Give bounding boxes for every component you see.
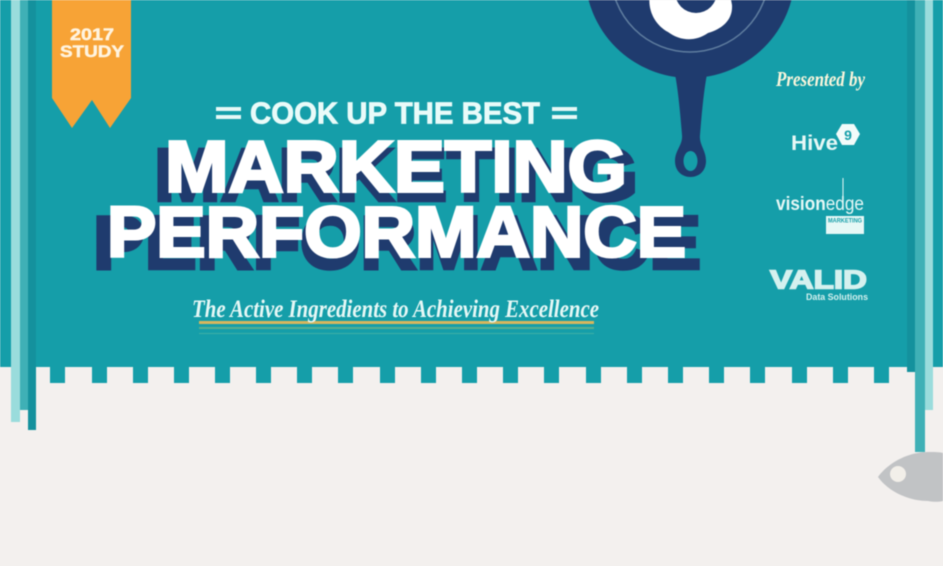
right hanging ribbon strips [907,0,933,452]
teal banner with notched edge [0,0,943,383]
subtitle with underline [192,296,599,334]
left hanging ribbon strips [11,0,36,430]
icon: frying pan with egg [585,0,795,177]
study ribbon badge: 2017 [70,25,114,44]
study ribbon badge [52,0,131,128]
logo: Valid Data Solutions [770,264,868,302]
logo: Hive9: 9 [844,127,852,143]
logo: VisionEdge Marketing: MARKETING [828,218,862,224]
title: marketing performance: PERFORMANCE [93,200,701,284]
subtitle with underline: The Active Ingredients to Achieving Excellence [192,296,599,323]
logo: Hive9: Hive [791,132,838,155]
logo: VisionEdge Marketing: visionedge [776,194,864,215]
presented by label: Presented by [775,67,866,91]
grey fish shape [878,452,943,502]
logo: VisionEdge Marketing [776,178,864,234]
title: marketing performance: MARKETING [165,128,627,208]
heading: cook up the best: COOK UP THE BEST [250,96,540,130]
logo: Hive9 [791,124,860,155]
study ribbon badge: STUDY [60,42,125,61]
title: marketing performance [93,128,701,284]
title: marketing performance: PERFORMANCE [107,194,686,272]
logo: Valid Data Solutions: Data Solutions [806,292,868,302]
logo: Valid Data Solutions: VALID [770,264,867,294]
title: marketing performance: MARKETING [154,134,638,216]
